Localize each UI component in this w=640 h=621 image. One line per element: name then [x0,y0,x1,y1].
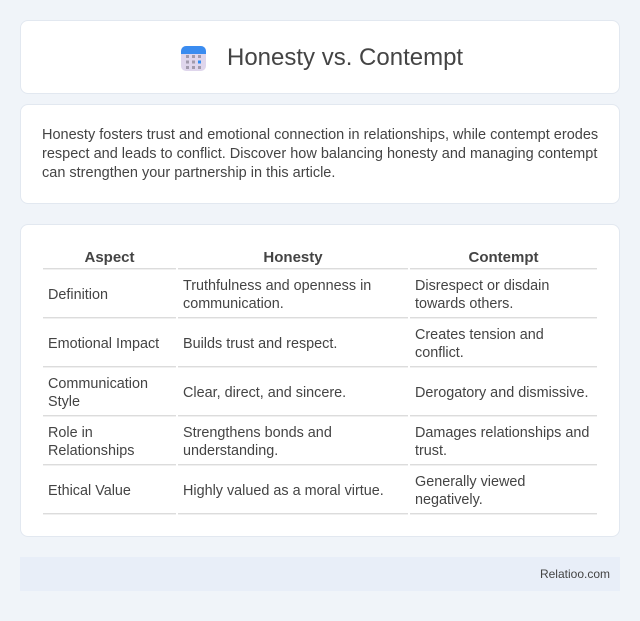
header card [20,20,620,94]
row: Communication Style [48,376,589,410]
row: Role in Relationships: understanding. [183,443,278,459]
row: Role in Relationships: Relationships [48,443,134,459]
row: Definition: Definition [48,287,108,303]
row: Ethical Value [48,474,525,508]
row: Ethical Value: Generally viewed [415,474,525,490]
intro text: can strengthen your partnership in this article. [42,165,335,181]
row: Emotional Impact: conflict. [415,345,464,361]
footer bar [20,557,620,591]
column header: Aspect: Aspect [84,249,135,266]
intro text [42,127,598,181]
row: Ethical Value: negatively. [415,492,483,508]
row: Ethical Value: Highly valued as a moral virtue. [183,483,384,499]
row: Role in Relationships: Role in [48,425,93,441]
row: Definition [48,278,549,312]
row: Definition: communication. [183,296,284,312]
row: Communication Style: Clear, direct, and sincere. [183,385,346,401]
row: Communication Style: Style [48,394,80,410]
title: Honesty vs. Contempt [227,44,463,71]
row: Definition: Truthfulness and openness in [183,278,371,294]
icon: calendar [181,46,206,71]
footer text: Relatioo.com [540,567,610,581]
row: Role in Relationships: Strengthens bonds and [183,425,332,441]
row: Definition: towards others. [415,296,513,312]
row: Emotional Impact: Builds trust and respect. [183,336,337,352]
intro text: respect and leads to conflict. Discover how balancing honesty and managing contempt [42,146,597,162]
row: Emotional Impact [48,327,544,361]
table card [20,224,620,537]
row: Communication Style: Communication [48,376,148,392]
row: Role in Relationships [48,425,589,459]
row: Role in Relationships: Damages relationships and [415,425,589,441]
row: Emotional Impact: Creates tension and [415,327,544,343]
intro card [20,104,620,204]
row: Ethical Value: Ethical Value [48,483,131,499]
intro text: Honesty fosters trust and emotional connection in relationships, while contempt erodes [42,127,598,143]
row: Communication Style: Derogatory and dismissive. [415,385,589,401]
column header: Contempt: Contempt [468,249,538,266]
row: Definition: Disrespect or disdain [415,278,549,294]
row: Role in Relationships: trust. [415,443,447,459]
row: Emotional Impact: Emotional Impact [48,336,159,352]
column header: Honesty: Honesty [263,249,323,266]
